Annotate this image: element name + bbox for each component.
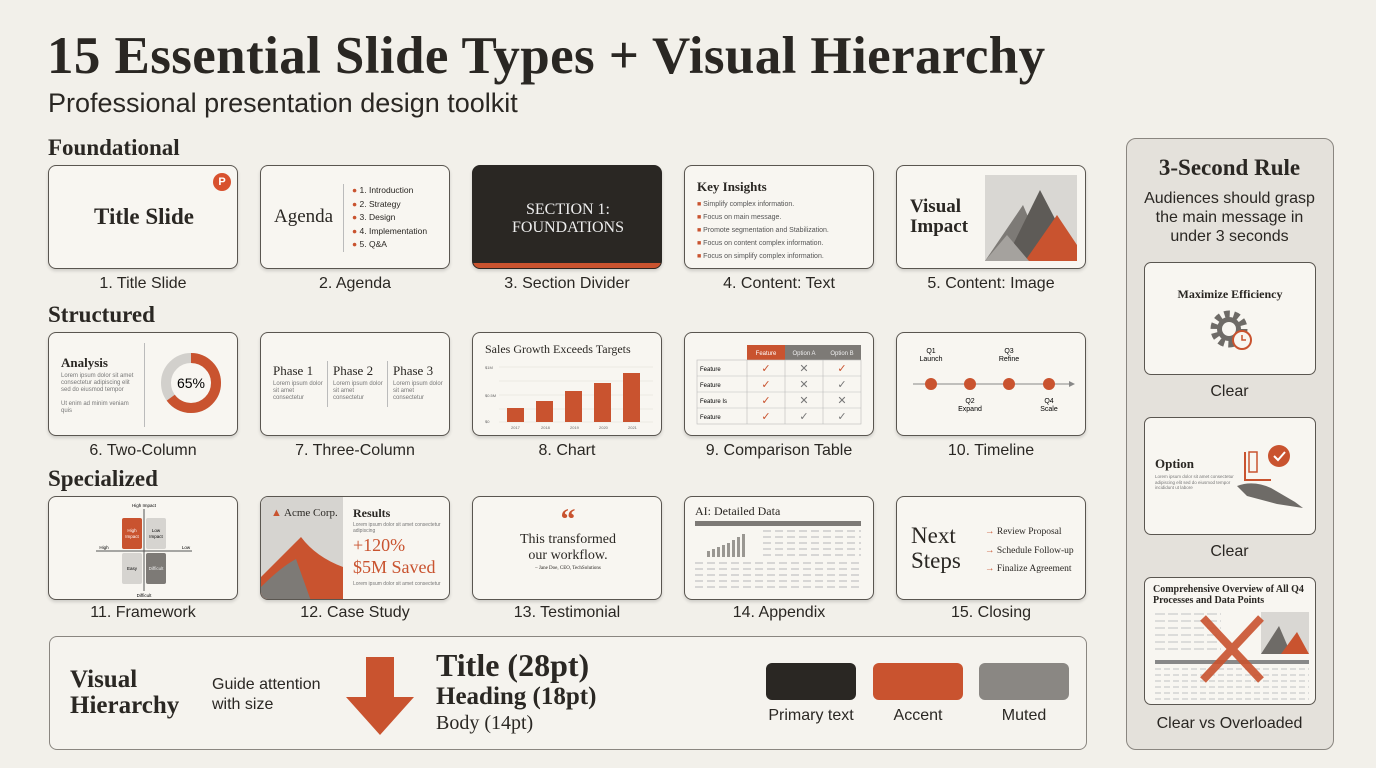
card 8: chart: Sales Growth Exceeds Targets xyxy=(485,342,631,356)
card 15: closing: Steps xyxy=(911,548,961,573)
card 4: content text: ■ Promote segmentation and Stabilization. xyxy=(697,227,829,234)
card 10: timeline: Q4 xyxy=(1044,398,1054,405)
text: guide attention xyxy=(212,676,321,713)
section: Specialized: Specialized xyxy=(48,466,158,491)
type scale: Body (14pt) xyxy=(436,712,533,734)
card 12: case study: ▲ Acme Corp. xyxy=(271,507,338,519)
card 10: timeline: Q1 xyxy=(926,348,936,355)
example: clear 2: Option xyxy=(1155,456,1194,471)
example: clear 1: Maximize Efficiency xyxy=(1178,287,1282,301)
card 7: three-column: Phase 3 xyxy=(393,363,433,378)
card 3: section divider: FOUNDATIONS xyxy=(512,219,624,236)
card 6: two-column: Lorem ipsum dolor sit amet consectetur adipiscing elit sed do eiusmod tempor xyxy=(61,373,133,393)
text: 1. Title Slide xyxy=(99,275,187,292)
card 8: chart: 2020 xyxy=(599,425,609,430)
card 6: two-column xyxy=(48,332,238,436)
text: 10. Timeline xyxy=(948,442,1034,459)
card 4: content text: ■ Focus on simplify complex information. xyxy=(697,253,824,260)
card 2: agenda: ● 1. Introduction xyxy=(352,185,413,195)
card 10: timeline: Launch xyxy=(920,356,943,363)
card 9: comparison table: Feature xyxy=(700,367,721,373)
card 9: comparison table: Feature xyxy=(756,351,777,357)
text: 4. Content: Text xyxy=(723,275,835,292)
card 4: content text xyxy=(684,165,874,269)
card 15: closing: → Schedule Follow-up xyxy=(985,546,1074,556)
type scale: Heading (18pt) xyxy=(436,683,596,710)
card 9: comparison table: ✕ xyxy=(799,395,809,407)
card 7: three-column xyxy=(260,332,450,436)
card 11: framework xyxy=(48,496,238,600)
card 14: appendix: AI: Detailed Data xyxy=(695,504,780,518)
card 3: section divider xyxy=(472,165,662,269)
text: 2. Agenda xyxy=(319,275,391,292)
card 7: three-column: Phase 1 xyxy=(273,363,313,378)
card 9: comparison table: ✓ xyxy=(837,379,847,391)
card 9: comparison table: ✓ xyxy=(837,411,847,423)
card 8: chart: $1M xyxy=(485,365,493,370)
text: 6. Two-Column xyxy=(89,442,197,459)
description: under 3 seconds xyxy=(1170,228,1289,245)
text: guide attention: Guide attention xyxy=(212,676,321,693)
card 14: appendix xyxy=(684,496,874,600)
card 9: comparison table: ✕ xyxy=(799,379,809,391)
card 9: comparison table: ✓ xyxy=(761,411,771,423)
card 9: comparison table: ✓ xyxy=(799,411,809,423)
example: clear 2: Lorem ipsum dolor sit amet consectetur adipiscing elit sed do eiusmod tempor incididunt ut labore xyxy=(1155,474,1234,490)
card 1: title slide xyxy=(48,165,238,269)
card 9: comparison table: ✕ xyxy=(837,395,847,407)
card 10: timeline: Q2 xyxy=(965,398,975,405)
card 11: framework: Impact xyxy=(125,534,139,539)
section: Structured: Structured xyxy=(48,302,155,327)
card 1: title slide: Title Slide xyxy=(94,204,194,229)
heading: 3-Second Rule xyxy=(1159,155,1300,180)
card 10: timeline: Scale xyxy=(1040,406,1058,413)
text: guide attention: with size xyxy=(212,696,273,713)
icon: down arrow xyxy=(346,657,414,735)
card 9: comparison table: ✓ xyxy=(837,363,847,375)
text: 11. Framework xyxy=(90,604,196,621)
text: 15. Closing xyxy=(951,604,1031,621)
card 10: timeline xyxy=(896,332,1086,436)
card 11: framework: Impact xyxy=(149,534,163,539)
card 13: testimonial xyxy=(472,496,662,600)
title: 15 Essential Slide Types + Visual Hierarchy xyxy=(47,27,1046,85)
description xyxy=(1144,190,1315,245)
card 15: closing: → Finalize Agreement xyxy=(985,564,1072,574)
card 5: content image xyxy=(896,165,1086,269)
card 9: comparison table: ✓ xyxy=(761,395,771,407)
text: 8. Chart xyxy=(539,442,595,459)
panel: 3-second rule: Clear xyxy=(1210,383,1249,400)
card 9: comparison table: ✓ xyxy=(761,363,771,375)
colour swatches: Primary text xyxy=(768,707,854,724)
panel: visual hierarchy xyxy=(49,636,1087,750)
card 13: testimonial: This transformed xyxy=(520,532,616,547)
card 2: agenda: ● 3. Design xyxy=(352,212,395,222)
card 15: closing: Next xyxy=(911,523,956,548)
card 12: case study: Lorem ipsum dolor sit amet consectetur xyxy=(353,581,441,587)
text: 12. Case Study xyxy=(300,604,410,621)
card 9: comparison table: Feature Is xyxy=(700,399,727,405)
card 13: testimonial: “ xyxy=(560,503,576,536)
card 8: chart: $0 xyxy=(485,419,490,424)
card 10: timeline: Refine xyxy=(999,356,1019,363)
card 4: content text: Key Insights xyxy=(697,179,767,194)
card 4: content text: ■ Focus on main message. xyxy=(697,214,781,221)
card 9: comparison table xyxy=(684,332,874,436)
text: 13. Testimonial xyxy=(514,604,620,621)
example: clear 1 xyxy=(1144,262,1316,375)
card 7: three-column: Lorem ipsum dolor sit amet consectetur xyxy=(333,381,383,401)
card 8: chart: $0.5M xyxy=(485,393,496,398)
card 12: case study: $5M Saved xyxy=(353,557,436,577)
card 2: agenda: Agenda xyxy=(274,206,333,227)
type scale xyxy=(436,647,596,734)
card 11: framework: Difficult xyxy=(149,566,164,571)
card 10: timeline: Q3 xyxy=(1004,348,1014,355)
card 2: agenda: ● 2. Strategy xyxy=(352,198,401,208)
card 7: three-column: Lorem ipsum dolor sit amet consectetur xyxy=(393,381,443,401)
text: 14. Appendix xyxy=(733,604,825,621)
example: overloaded: Comprehensive Overview of All Q4 xyxy=(1153,584,1304,595)
card 11: framework: High Impact xyxy=(132,503,157,508)
card 11: framework: High xyxy=(127,528,137,533)
card 12: case study: Lorem ipsum dolor sit amet consectetur adipiscing xyxy=(353,522,441,534)
card 5: content image: Visual xyxy=(910,196,961,217)
panel: 3-second rule xyxy=(1126,138,1334,750)
card 2: agenda: ● 5. Q&A xyxy=(352,239,387,249)
card 8: chart: 2021 xyxy=(628,425,638,430)
text: 9. Comparison Table xyxy=(706,442,852,459)
card 3: section divider: SECTION 1: xyxy=(526,201,610,218)
heading: visual hierarchy: Visual xyxy=(70,666,137,693)
card 2: agenda: ● 4. Implementation xyxy=(352,226,427,236)
heading: visual hierarchy: Hierarchy xyxy=(70,692,179,719)
text: 3. Section Divider xyxy=(504,275,630,292)
example: overloaded xyxy=(1144,577,1316,705)
card 9: comparison table: Option A xyxy=(792,351,816,357)
card 7: three-column: Lorem ipsum dolor sit amet consectetur xyxy=(273,381,323,401)
section: Foundational: Foundational xyxy=(48,135,180,160)
colour swatches xyxy=(766,663,1069,724)
card 9: comparison table: Feature xyxy=(700,383,721,389)
card 11: framework: Low xyxy=(182,545,191,550)
subtitle: Professional presentation design toolkit xyxy=(48,88,518,118)
card 7: three-column: Phase 2 xyxy=(333,363,373,378)
card 6: two-column: 65% xyxy=(177,375,205,391)
card 8: chart: 2019 xyxy=(570,425,580,430)
card 8: chart xyxy=(472,332,662,436)
card 8: chart: 2018 xyxy=(541,425,551,430)
text: 5. Content: Image xyxy=(927,275,1055,292)
card 9: comparison table: ✓ xyxy=(761,379,771,391)
card 9: comparison table: ✕ xyxy=(799,363,809,375)
card 15: closing xyxy=(896,496,1086,600)
colour swatches: Accent xyxy=(894,707,942,724)
card 2: agenda xyxy=(260,165,450,269)
card 5: content image: Impact xyxy=(910,216,968,237)
card 11: framework: Easy xyxy=(127,566,138,571)
card 15: closing: → Review Proposal xyxy=(985,527,1062,537)
example: clear 2 xyxy=(1144,417,1316,535)
description: Audiences should grasp xyxy=(1144,190,1315,207)
example: overloaded: Processes and Data Points xyxy=(1153,595,1264,606)
card 12: case study: Results xyxy=(353,506,390,520)
type scale: Title (28pt) xyxy=(436,647,589,683)
card 9: comparison table: Feature xyxy=(700,415,721,421)
panel: 3-second rule: Clear vs Overloaded xyxy=(1157,715,1302,732)
card 12: case study xyxy=(260,496,450,600)
card 4: content text: ■ Simplify complex information. xyxy=(697,201,794,208)
card 10: timeline: Expand xyxy=(958,406,982,413)
text: 7. Three-Column xyxy=(295,442,415,459)
card 13: testimonial: our workflow. xyxy=(528,548,608,563)
card 11: framework: Low xyxy=(152,528,161,533)
card 6: two-column: Analysis xyxy=(61,355,108,370)
card 6: two-column: Ut enim ad minim veniam quis xyxy=(61,401,129,414)
panel: 3-second rule: Clear xyxy=(1210,543,1249,560)
card 1: title slide: P xyxy=(218,176,226,188)
card 9: comparison table: Option B xyxy=(830,351,854,357)
card 13: testimonial: – Jane Doe, CEO, TechSolutions xyxy=(535,566,601,571)
colour swatches: Muted xyxy=(1002,707,1046,724)
description: the main message in xyxy=(1156,209,1303,226)
card 12: case study: +120% xyxy=(353,535,405,555)
card 8: chart: 2017 xyxy=(511,425,521,430)
heading: visual hierarchy xyxy=(70,666,179,719)
card 4: content text: ■ Focus on content complex information. xyxy=(697,240,823,247)
card 11: framework: High xyxy=(99,545,109,550)
